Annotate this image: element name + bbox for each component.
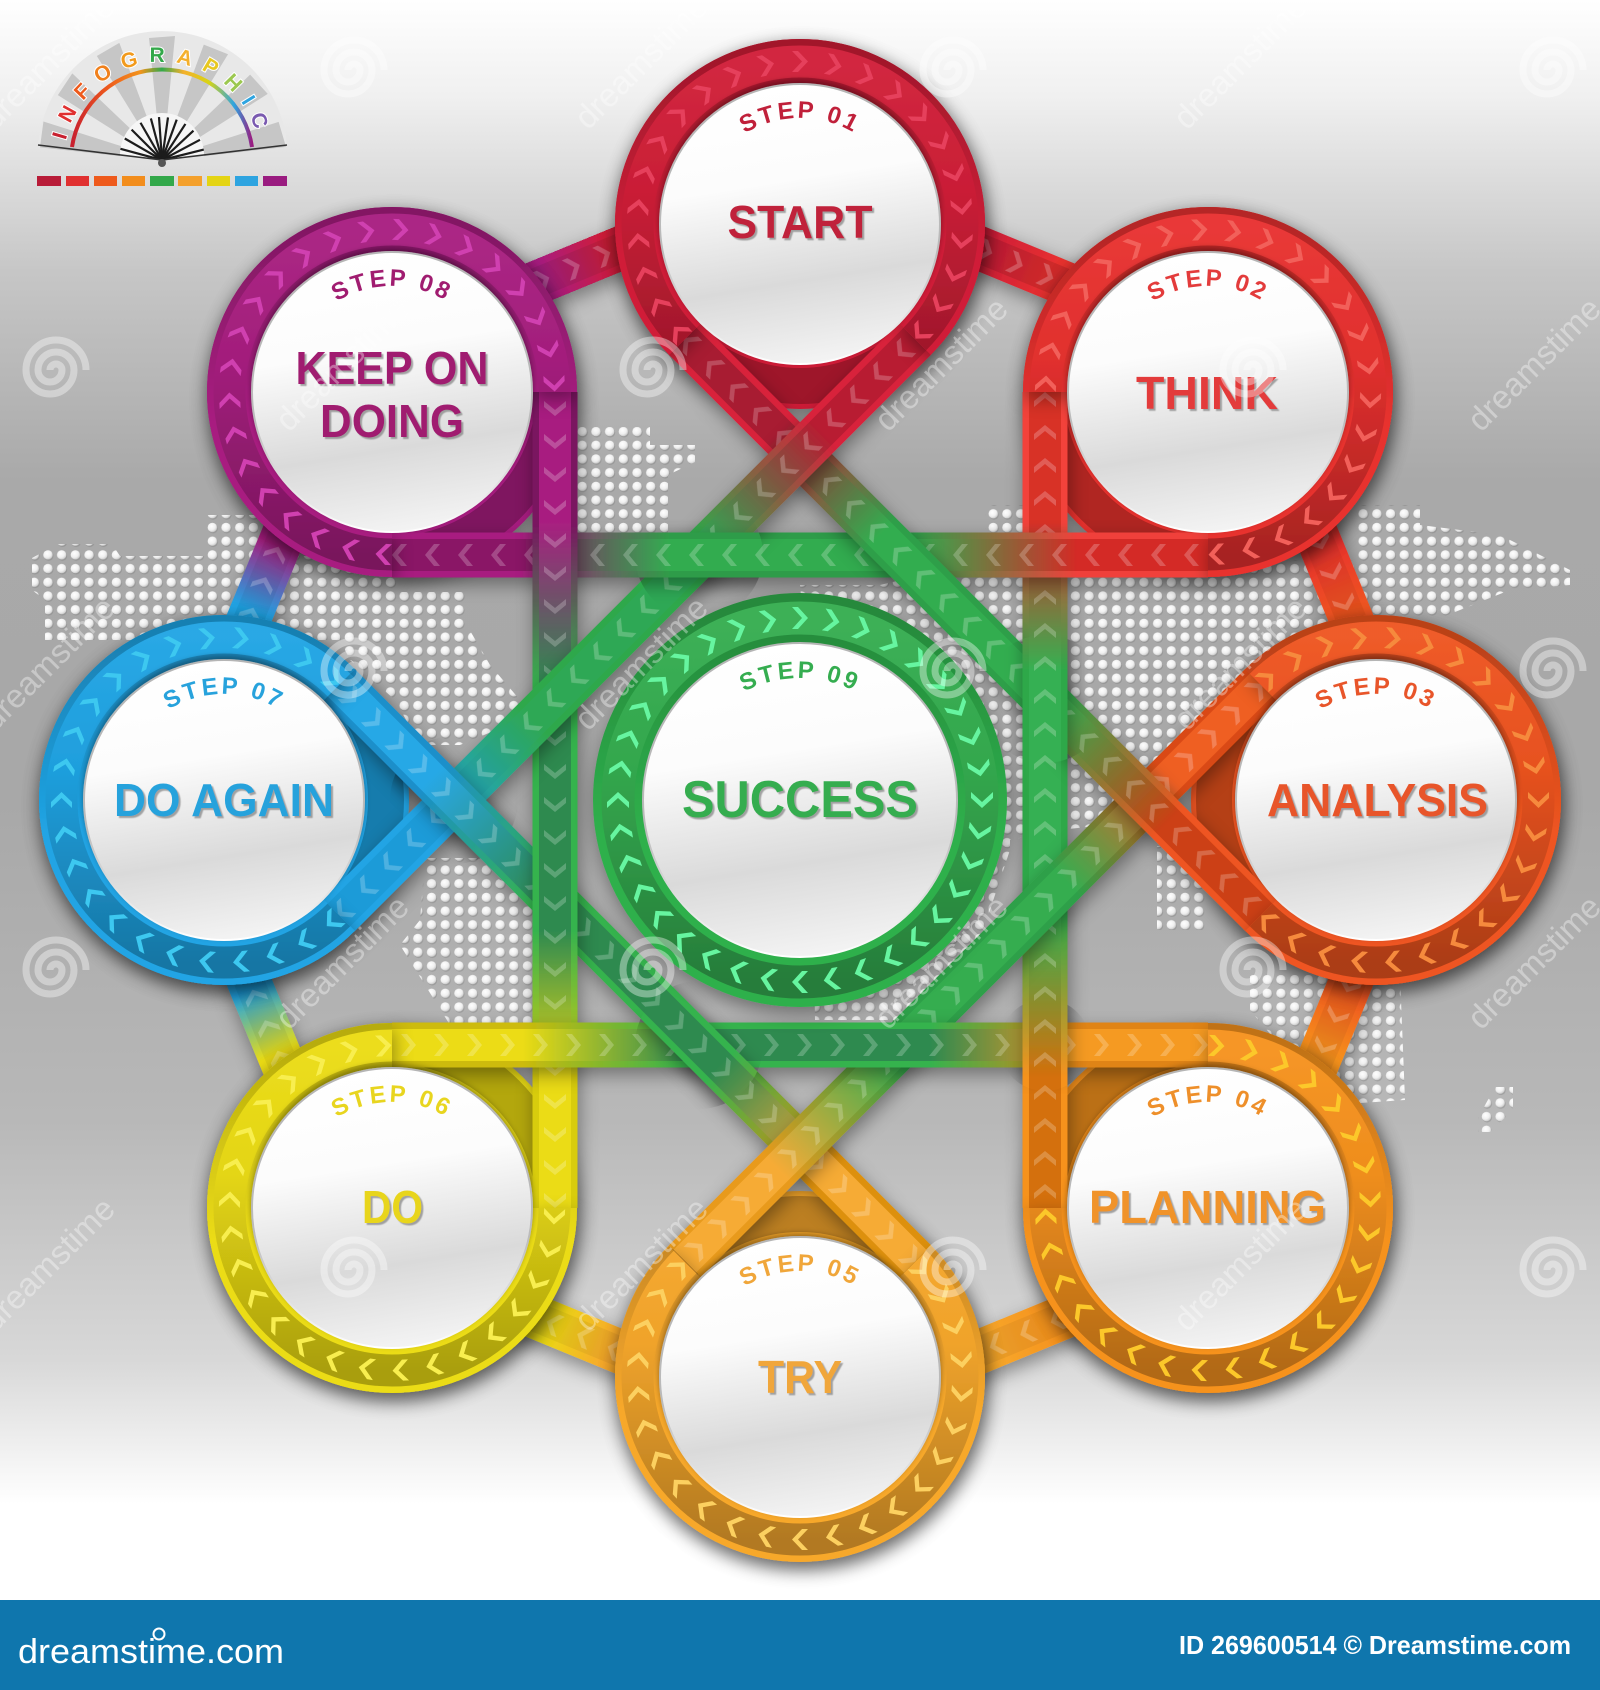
logo: infographic fan xyxy=(37,31,287,186)
dotted world map xyxy=(32,427,1570,1132)
ribbon: step 08 to step 06 xyxy=(532,392,578,1208)
step label: STEP 04 xyxy=(1148,1085,1266,1116)
title: ANALYSIS xyxy=(1267,774,1488,826)
white disc xyxy=(252,252,532,532)
logo word: INFOGRAPHIC xyxy=(48,44,276,142)
colour bars xyxy=(37,176,287,186)
step 07: do again xyxy=(51,627,386,973)
step 06: do xyxy=(147,1000,600,1453)
watermark words: dreamstime xyxy=(867,290,1015,438)
watermark words: dreamstime xyxy=(867,1490,1015,1638)
ring with arrows xyxy=(51,627,386,973)
ring with arrows xyxy=(627,51,973,386)
step label: STEP 03 xyxy=(1316,677,1434,708)
title: DOING xyxy=(320,395,464,447)
step 02: think xyxy=(1016,202,1405,595)
title: PLANNING xyxy=(1089,1181,1326,1233)
ring with arrows xyxy=(1214,627,1549,973)
woven ribbons xyxy=(323,323,1277,1277)
white disc xyxy=(660,84,940,364)
footer credit: ID 269600514 © Dreamstime.com xyxy=(1179,1630,1571,1660)
ribbon: step 06 to step 04 xyxy=(392,1022,1208,1068)
white disc xyxy=(1236,660,1516,940)
fan paper xyxy=(38,31,287,167)
white disc xyxy=(660,1237,940,1517)
ring with arrows xyxy=(1016,202,1405,595)
watermark words: dreamstime xyxy=(567,589,715,737)
title: SUCCESS xyxy=(682,771,918,829)
rainbow arc xyxy=(72,69,252,147)
title: DO AGAIN xyxy=(114,774,334,826)
step label: STEP 09 xyxy=(740,661,858,690)
watermark words: dreamstime xyxy=(268,1490,416,1638)
step 08: keep on doing xyxy=(147,147,600,600)
step label: STEP 07 xyxy=(164,677,284,708)
watermark words: dreamstime xyxy=(867,888,1015,1036)
watermark words: dreamstime xyxy=(268,888,416,1036)
step label: STEP 05 xyxy=(740,1254,859,1284)
watermark words: dreamstime xyxy=(268,290,416,438)
title: KEEP ON xyxy=(296,342,488,394)
title: DO xyxy=(362,1181,423,1233)
step 04: planning xyxy=(1015,1021,1406,1411)
step label: STEP 06 xyxy=(332,1085,450,1116)
step label: STEP 02 xyxy=(1148,269,1266,300)
step 01: start xyxy=(606,34,998,366)
white disc xyxy=(643,643,957,957)
ribbon: step 02 to step 08 xyxy=(392,532,1208,578)
watermark words: dreamstime xyxy=(1166,1190,1314,1338)
ribbon: step 07 to step 05 xyxy=(323,669,931,1277)
watermark words: dreamstime xyxy=(567,1190,715,1338)
step label: STEP 08 xyxy=(332,269,450,300)
white disc xyxy=(84,660,364,940)
white disc xyxy=(252,1068,532,1348)
ribbon: step 03 to step 01 xyxy=(669,323,1277,931)
ribbon: step 01 to step 07 xyxy=(323,323,931,931)
ring with arrows xyxy=(147,147,600,600)
footer bar xyxy=(0,1600,1600,1690)
title: TRY xyxy=(758,1351,842,1403)
ring with arrows xyxy=(627,1214,973,1550)
step 05: try xyxy=(606,1230,998,1580)
step label: STEP 01 xyxy=(740,101,856,132)
ring with arrows xyxy=(1015,1021,1406,1411)
footer logo: dreamstime.com xyxy=(18,1633,284,1671)
title: START xyxy=(728,196,872,248)
weave crossings xyxy=(392,528,1082,1108)
watermark words: dreamstime xyxy=(1166,589,1314,737)
white disc xyxy=(1068,252,1348,532)
step 03: analysis xyxy=(1232,610,1573,1004)
step 09: success (center) xyxy=(607,607,993,993)
center ring with arrows xyxy=(607,607,993,993)
ribbon: step 04 to step 02 xyxy=(1022,392,1068,1208)
ring with arrows xyxy=(147,1000,600,1453)
connectors between neighbouring steps xyxy=(161,161,1439,1439)
ribbon: step 05 to step 03 xyxy=(669,669,1277,1277)
white disc xyxy=(1068,1068,1348,1348)
title: THINK xyxy=(1136,367,1278,419)
